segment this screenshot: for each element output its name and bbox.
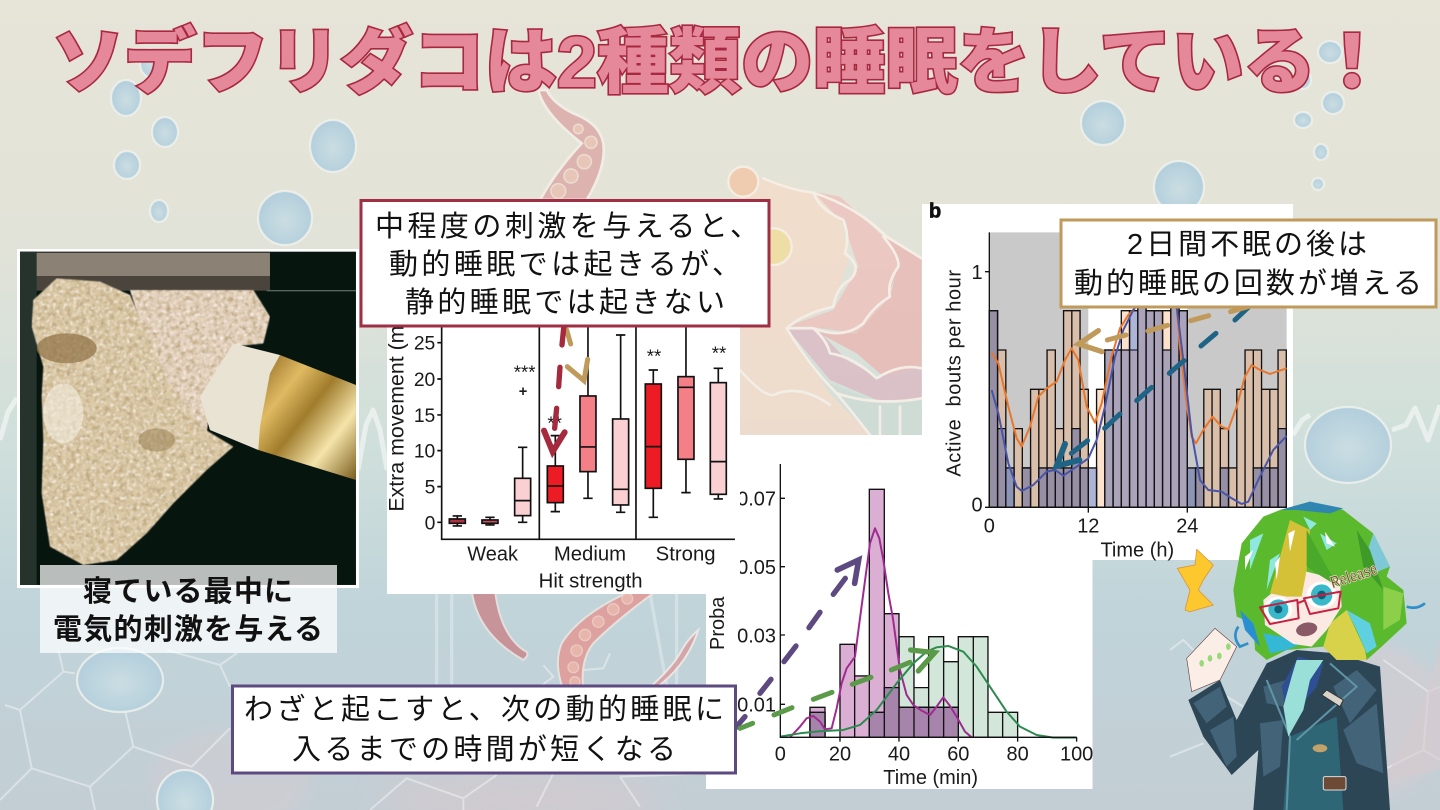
panel: latency histogram chart: 60 (947, 744, 969, 766)
glasses (1260, 592, 1341, 624)
icon: lightning shock (1177, 549, 1213, 612)
tentacle top (538, 90, 604, 200)
panel: box plot chart (384, 300, 740, 594)
axes (985, 232, 1287, 513)
panel: latency histogram chart: 80 (1007, 744, 1029, 766)
octopus body (728, 167, 922, 435)
y axis title: Extra movement (min) (384, 302, 408, 512)
title: ソデフリダコは2種類の睡眠をしている！ (52, 23, 1388, 103)
panel: latency histogram chart: 100 (1060, 744, 1093, 766)
category labels: Strong (656, 544, 716, 566)
character (1187, 502, 1425, 810)
callout: sleep deprivation: 動的睡眠の回数が増える (1074, 267, 1422, 300)
green bars (810, 637, 1018, 737)
pocket pen and pin (1323, 777, 1346, 790)
callout: medium stimulus: 中程度の刺激を与えると、 (375, 210, 759, 243)
axes (780, 464, 1077, 742)
significance marks (514, 343, 726, 433)
tick labels: 0.03 (737, 625, 776, 647)
callout: shorter latency: わざと起こすと、次の動的睡眠に (244, 693, 724, 726)
tick labels (414, 334, 435, 534)
hair highlights (1270, 520, 1310, 597)
pink bars (810, 489, 958, 737)
under tie (1282, 657, 1323, 710)
tick labels: 10 (414, 442, 435, 463)
arrow: green (740, 650, 935, 728)
category labels: Weak (467, 544, 519, 566)
hand (1187, 628, 1237, 692)
callout: medium stimulus (361, 200, 769, 326)
tick labels: 0.05 (737, 557, 776, 579)
y axis title: Proba (707, 596, 729, 650)
arrow: red (544, 325, 565, 452)
medium boxes (547, 396, 629, 505)
mouth (1295, 621, 1318, 638)
tick labels: 0 (425, 513, 435, 534)
face (1263, 570, 1342, 647)
callout: medium stimulus: 動的睡眠では起きるが、 (389, 248, 741, 281)
tie (1283, 660, 1323, 737)
axis labels: Active bouts per hour (944, 270, 966, 477)
brush ferrule (258, 355, 356, 480)
whiskers (453, 323, 723, 526)
panel letter: b (929, 200, 941, 222)
tick labels (737, 489, 776, 716)
panel: latency histogram chart: 40 (888, 744, 910, 766)
caption box: 寝ている最中に (83, 575, 293, 608)
axis labels: 1 (972, 262, 983, 284)
tick labels: 0.01 (737, 694, 776, 716)
panel: latency histogram chart: 0 (775, 744, 786, 766)
overlap bars (810, 688, 958, 737)
axes and separators (437, 300, 735, 539)
significance marks: ** (712, 343, 726, 364)
green density curve (780, 646, 1077, 738)
panel: active bouts chart (922, 200, 1293, 562)
callout: shorter latency: 入るまでの時間が短くなる (292, 733, 676, 766)
category labels (467, 544, 716, 592)
tick labels: 20 (414, 370, 435, 391)
tentacles bottom (472, 590, 698, 690)
tick labels: 0.07 (737, 489, 776, 511)
caption box (40, 565, 337, 653)
arrow: tan (1079, 307, 1248, 352)
axis labels: Time (h) (1100, 540, 1174, 562)
tick labels: 15 (414, 406, 435, 427)
orange curve (992, 287, 1287, 447)
axis labels (944, 262, 1198, 562)
tick labels: 25 (414, 334, 435, 355)
stray curl (1235, 603, 1425, 647)
axis labels: 12 (1077, 515, 1099, 537)
strong boxes (645, 377, 726, 494)
callout: medium stimulus: 静的睡眠では起きない (405, 286, 725, 319)
orange bars (989, 272, 1286, 507)
jacket (1188, 650, 1390, 810)
tank edge (33, 253, 270, 277)
panel: photo of octopus (17, 249, 359, 588)
night shading (989, 232, 1287, 507)
name badge (1322, 690, 1343, 707)
blue bars (989, 272, 1286, 507)
blue curve (992, 287, 1287, 504)
arrow: purple (735, 560, 859, 728)
hair back (1233, 502, 1407, 660)
significance marks: ** (647, 345, 661, 366)
category labels: Medium (554, 544, 626, 566)
significance marks: *** (514, 361, 536, 382)
axis labels: 0 (984, 515, 995, 537)
brush tip (200, 343, 280, 450)
callout: sleep deprivation: 2日間不眠の後は (1127, 228, 1367, 261)
callout: shorter latency (232, 686, 736, 773)
arrow: tan chevron (567, 330, 588, 381)
axis labels: 0 (972, 494, 983, 516)
significance marks: ** (547, 412, 562, 433)
octopus body (32, 278, 233, 565)
eyes (1264, 597, 1292, 622)
panel: latency histogram chart: 20 (829, 744, 851, 766)
octopus back mantle (130, 290, 270, 433)
hairpin Release: Release (1328, 558, 1380, 592)
tick labels: 5 (425, 478, 435, 499)
caption box: 電気的刺激を与える (53, 613, 323, 646)
panel: latency histogram chart: Time (min) (883, 767, 978, 789)
significance marks: + (519, 384, 527, 400)
weak boxes (449, 478, 531, 523)
panel: latency histogram chart (706, 435, 1093, 789)
arrow: teal (1057, 307, 1248, 466)
magenta density curve (790, 528, 972, 737)
category labels: Hit strength (539, 570, 643, 592)
callout: sleep deprivation (1061, 220, 1436, 307)
axis labels: 24 (1176, 515, 1198, 537)
